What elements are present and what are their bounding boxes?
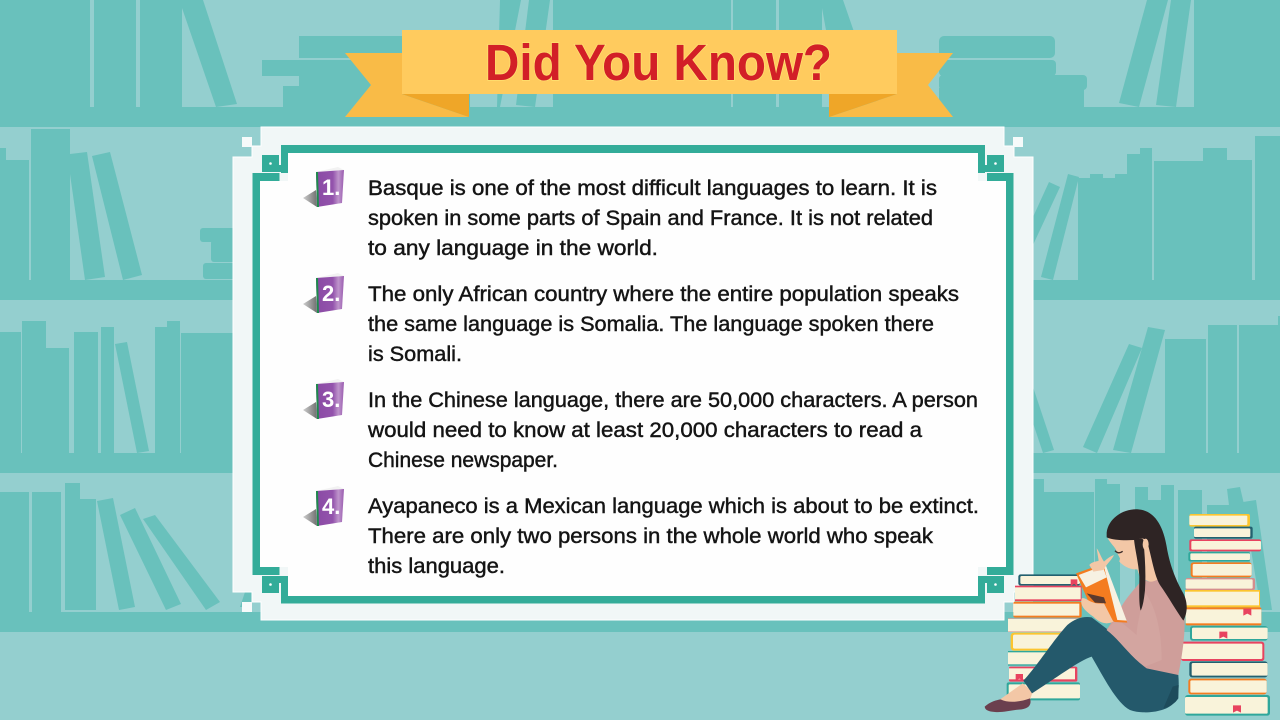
- ribbon banner: [345, 30, 953, 117]
- foot and shoe: [998, 683, 1033, 703]
- fact 4 text: this language.: [368, 555, 505, 578]
- panel: facts card: [233, 127, 1033, 620]
- fact 4 text: [368, 495, 979, 578]
- left book stack: [1007, 574, 1082, 700]
- right ribbon tail: [829, 53, 953, 117]
- fact 2 text: [368, 283, 959, 366]
- shelf boards: [0, 107, 1280, 632]
- ear: [1143, 539, 1149, 550]
- icon: purple book 1: [303, 167, 344, 207]
- books: third shelf: [0, 316, 1280, 453]
- icon: purple book 2: 2.: [322, 281, 340, 306]
- fact 2 text: the same language is Somalia. The language spoken there: [368, 313, 934, 336]
- card inner white: [260, 153, 1006, 596]
- sweater: [1107, 577, 1185, 675]
- fact 4 text: There are only two persons in the whole world who speak: [368, 525, 934, 548]
- right book stack: [1181, 514, 1270, 716]
- icon: purple book 1: 1.: [322, 175, 340, 200]
- fact 3 text: [367, 389, 978, 472]
- neck and face: [1108, 537, 1162, 585]
- icon: purple book 2: [303, 273, 344, 313]
- eye: [1115, 551, 1123, 553]
- hands: [1089, 548, 1114, 572]
- hair front lock: [1134, 538, 1145, 611]
- girl figure: [985, 509, 1187, 712]
- open book: [1076, 563, 1127, 623]
- books: top shelf: [0, 0, 1280, 107]
- fact 2 text: The only African country where the entire population speaks: [368, 283, 959, 306]
- hair: [1107, 509, 1187, 621]
- fact 4 text: Ayapaneco is a Mexican language which is about to be extinct.: [368, 495, 979, 518]
- title: Did You Know?: [485, 34, 832, 91]
- card outer border: [233, 127, 1033, 620]
- teal frame: [252, 145, 1014, 604]
- fact 1 text: spoken in some parts of Spain and France. It is not related: [368, 207, 933, 230]
- icon: purple book 3: 3.: [322, 387, 340, 412]
- fact 1 text: to any language in the world.: [368, 237, 658, 260]
- icon: purple book 3: [303, 379, 344, 419]
- fact 1 text: [368, 177, 937, 260]
- left ribbon tail: [345, 53, 469, 117]
- fact 3 text: Chinese newspaper.: [368, 449, 558, 472]
- fact 1 text: Basque is one of the most difficult languages to learn. It is: [368, 177, 937, 200]
- illustration: girl reading with book stacks: [985, 509, 1270, 716]
- trousers: [1023, 617, 1179, 712]
- books: second shelf: [0, 129, 1280, 280]
- fact 3 text: would need to know at least 20,000 characters to read a: [367, 419, 922, 442]
- books: bottom shelf: [0, 479, 1272, 612]
- fact 2 text: is Somali.: [368, 343, 462, 366]
- fact 3 text: In the Chinese language, there are 50,000 characters. A person: [368, 389, 978, 412]
- icon: purple book 4: [303, 486, 344, 526]
- icon: purple book 4: 4.: [322, 494, 340, 519]
